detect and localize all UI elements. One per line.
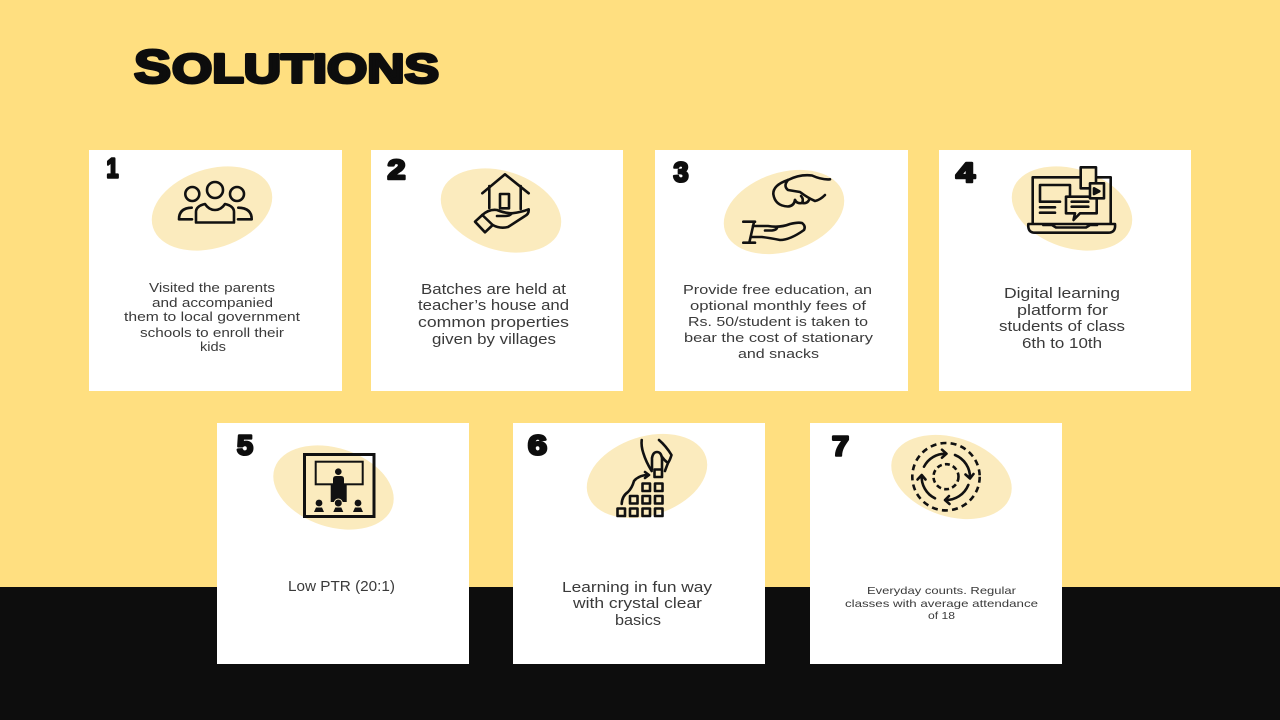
panel: card 7: 7 <box>832 430 849 462</box>
panel: card 5 <box>217 423 469 664</box>
text: card 6: Learning in fun way <box>562 580 713 596</box>
text: card 2: Batches are held at <box>421 282 566 298</box>
icon: digital laptop <box>1028 167 1115 233</box>
text: card 3: and snacks <box>738 346 820 361</box>
text: card 7 <box>845 585 1038 622</box>
icon: blocks and hand <box>618 440 672 516</box>
text: card 2: common properties <box>418 315 569 331</box>
panel: card 2: 2 <box>388 154 406 185</box>
text: card 7: classes with average attendance <box>845 598 1038 610</box>
icon: classroom <box>304 454 374 516</box>
text: card 1: schools to enroll their <box>140 326 284 340</box>
panel: card 6: 6 <box>528 430 547 460</box>
text: card 2: teacher’s house and <box>418 298 569 314</box>
text: card 4: students of class <box>999 319 1125 335</box>
text: card 1: them to local government <box>124 310 301 324</box>
panel: card 7 <box>810 420 1062 664</box>
text: card 6: basics <box>615 613 661 629</box>
panel: card 6 <box>513 419 765 664</box>
text: card 7: Everyday counts. Regular <box>867 585 1017 597</box>
title: OLUTIONS <box>172 46 439 92</box>
text: card 2: given by villages <box>432 332 556 348</box>
panel: card 4: 4 <box>956 157 976 188</box>
panel: card 4 <box>939 150 1191 391</box>
text: card 7: of 18 <box>928 610 955 622</box>
panel: card 2 <box>371 150 623 391</box>
panel: card 5: 5 <box>237 430 253 460</box>
panel: card 1 <box>89 150 342 391</box>
text: card 4 <box>999 286 1125 352</box>
text: card 1: Visited the parents <box>149 281 275 295</box>
text: card 4: 6th to 10th <box>1022 336 1102 352</box>
icon: dashed cycle <box>912 443 980 510</box>
text: card 5: Low PTR (20:1) <box>288 579 395 595</box>
panel: card 3: 3 <box>674 156 688 188</box>
icon: people <box>179 182 252 222</box>
text: card 1 <box>124 281 301 354</box>
icon: giving hands <box>743 175 830 243</box>
icon: house in hand <box>475 174 529 232</box>
text: card 1: and accompanied <box>152 296 273 310</box>
text: card 2 <box>418 282 569 348</box>
title: S <box>134 40 171 92</box>
text: card 1: kids <box>200 340 226 354</box>
text: card 3: Provide free education, an <box>683 282 872 297</box>
panel: card 1: 1 <box>106 152 118 184</box>
panel: card 3 <box>655 150 908 391</box>
text: card 4: Digital learning <box>1004 286 1120 302</box>
text: card 3: Rs. 50/student is taken to <box>688 314 868 329</box>
text: card 3: optional monthly fees of <box>690 298 866 313</box>
text: card 4: platform for <box>1017 303 1108 319</box>
title <box>134 40 439 92</box>
text: card 3 <box>683 282 874 361</box>
text: card 6: with crystal clear <box>572 596 702 612</box>
text: card 3: bear the cost of stationary <box>684 330 874 345</box>
text: card 6 <box>562 580 713 629</box>
